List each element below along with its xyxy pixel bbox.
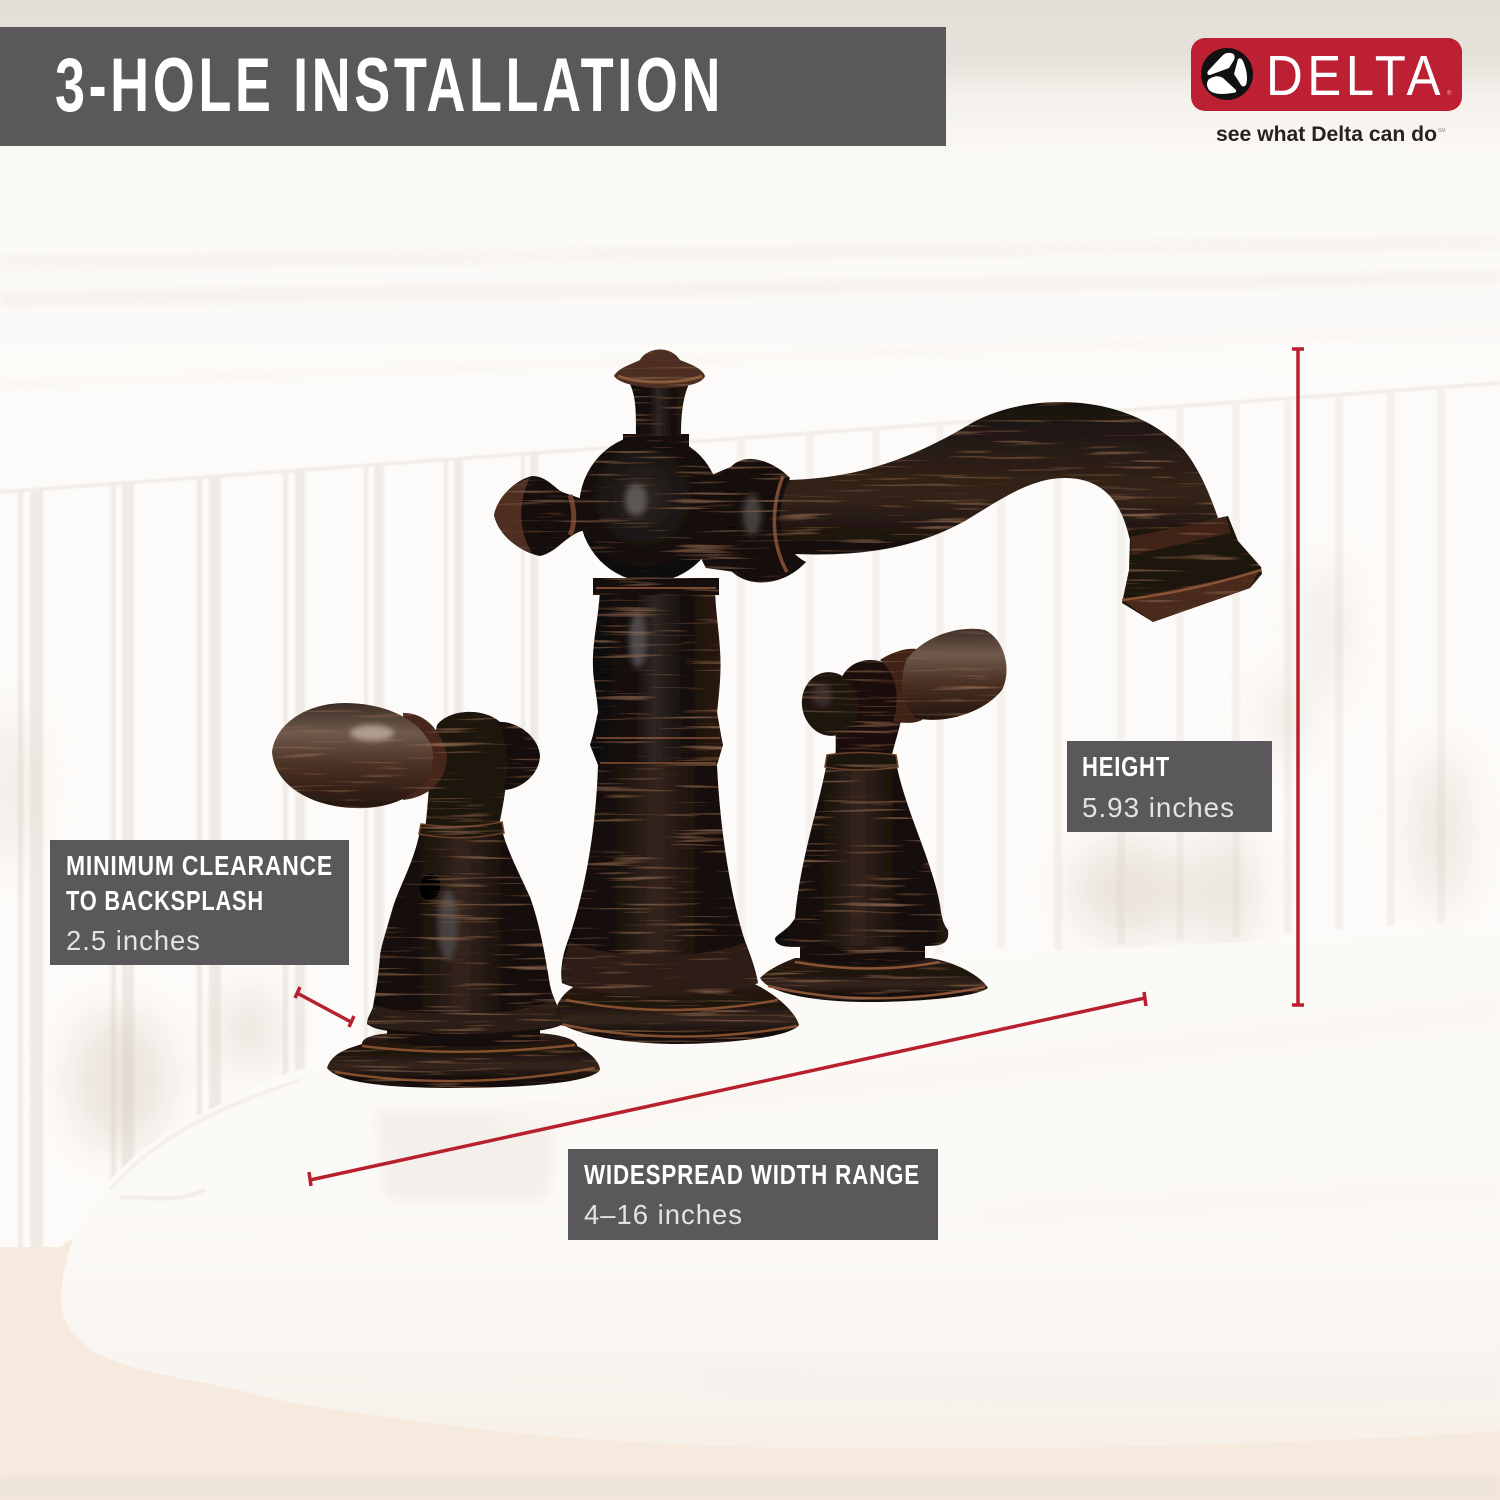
dimension line: height [1292,348,1304,1005]
centre column [494,349,1262,1044]
bell [367,830,563,1034]
dimension line: width range [309,992,1146,1186]
callout: widespread width range: 4–16 inches [584,1199,743,1230]
dimension line: clearance [295,987,354,1027]
spout [695,402,1262,622]
right lever [880,629,1007,723]
left lever [272,703,447,808]
title banner [0,27,946,146]
soft wall shadows [0,560,1464,1150]
bell [561,765,758,996]
Delta logo [1191,38,1462,146]
callout: widespread width range: WIDESPREAD WIDTH RANGE [584,1159,920,1190]
beadboard panel [0,383,1500,1253]
small knob [797,668,863,740]
left stub handle [494,476,585,556]
spout collar [695,465,735,572]
base [554,982,799,1044]
collar [593,578,719,595]
Delta logo: DELTA [1266,44,1445,108]
neck [835,660,905,762]
aerator [1122,516,1262,622]
icon: Delta triangle mark [1201,48,1253,100]
callout: minimum clearance: MINIMUM CLEARANCE [66,850,333,881]
left handle [272,703,600,1088]
ring [590,712,723,765]
callout: height: 5.93 inches [1082,792,1235,823]
faucet reflection in sink [110,1080,555,1200]
title banner: 3-HOLE INSTALLATION [55,43,724,128]
ring [419,822,504,838]
neck [425,712,507,830]
right handle [760,629,1007,1002]
hole [417,872,443,902]
callout: minimum clearance: TO BACKSPLASH [66,885,264,916]
callout: widespread width range [568,1149,938,1240]
base [327,1033,600,1088]
callout: height: HEIGHT [1082,751,1170,782]
base [760,958,988,1002]
callout: height [1067,741,1272,832]
faucet [272,349,1262,1088]
counter and sink [0,929,1500,1500]
callout: minimum clearance: 2.5 inches [66,925,201,956]
Delta logo: SM [1438,128,1446,134]
Delta logo: ® [1447,90,1452,97]
rear knob [497,722,540,790]
sphere [579,434,721,582]
Delta logo: see what Delta can do [1216,123,1437,146]
top cross handle finial [614,349,705,436]
body [593,590,721,714]
callout: minimum clearance [50,840,349,965]
bell [775,762,948,947]
